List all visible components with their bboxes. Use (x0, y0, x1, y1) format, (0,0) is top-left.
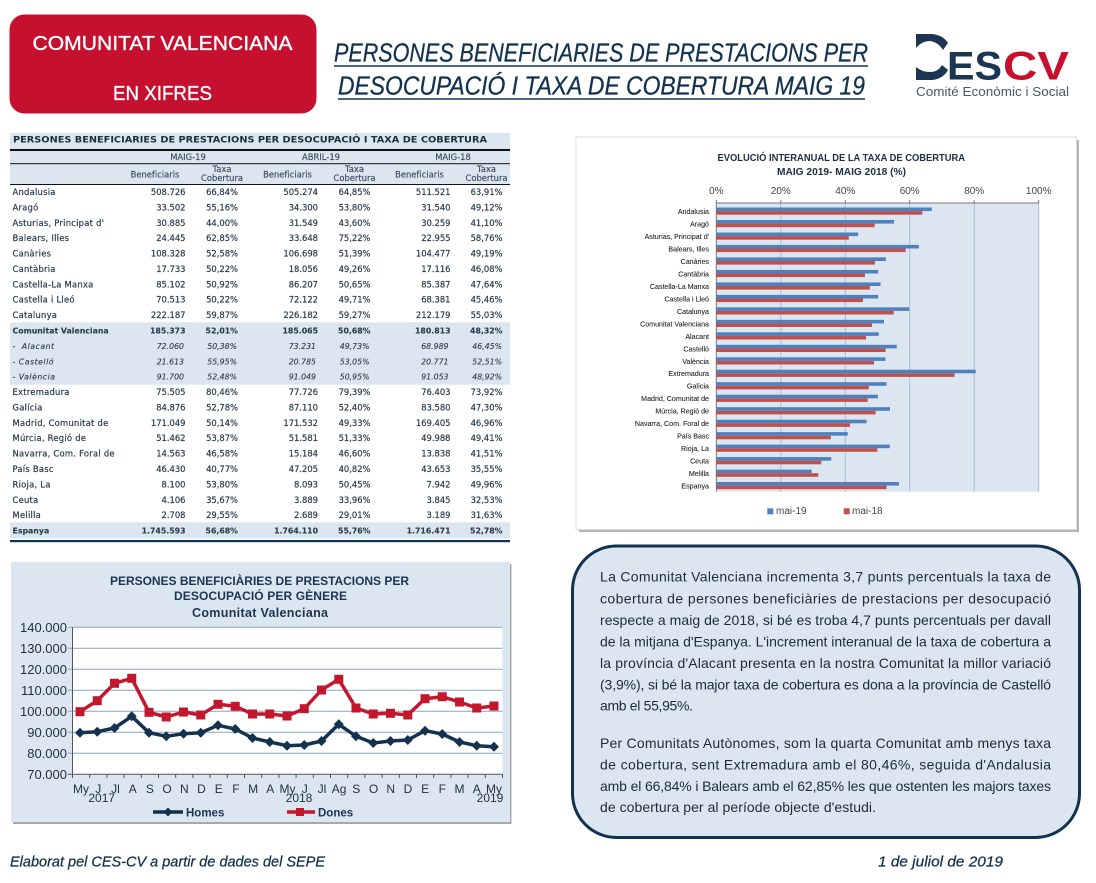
table rows: 44,00% (206, 218, 238, 228)
table rows: 3.189 (427, 510, 450, 520)
main title: PERSONES BENEFICIARIES DE PRESTACIONS PER (334, 38, 868, 68)
table rows: 180.813 (415, 326, 450, 336)
table rows: - València (12, 373, 56, 382)
table rows: Aragó (12, 202, 38, 212)
bar chart legend (767, 506, 883, 517)
line chart x axis labels: A (129, 782, 137, 796)
table rows: Comunitat Valenciana (12, 326, 109, 336)
table rows: 52,01% (206, 326, 238, 336)
table rows: 7.942 (427, 479, 450, 489)
line chart x axis labels: My (486, 782, 502, 796)
table rows: 50,92% (206, 279, 238, 289)
bar chart category labels: Catalunya (677, 308, 709, 316)
table rows: 3.889 (294, 495, 318, 505)
bar chart axis labels: 0% (709, 186, 724, 197)
table rows: 2.689 (294, 510, 318, 520)
line chart x axis labels: 2018 (286, 791, 313, 805)
line chart x axis labels: 2017 (88, 791, 115, 805)
bar chart category labels: Cantàbria (678, 270, 709, 278)
line chart y axis labels: 90.000 (27, 725, 67, 740)
table rows: 222.187 (151, 310, 186, 320)
table rows: 226.182 (283, 310, 318, 320)
table rows: 47.205 (289, 464, 318, 474)
bar chart axis labels: 100% (1026, 186, 1052, 197)
table column headers (131, 152, 508, 183)
bars: mai-19 (716, 208, 976, 486)
header badge: Comunitat Valenciana en xifres (10, 14, 316, 114)
table rows: 55,95% (207, 357, 237, 366)
table rows: 51.462 (156, 433, 186, 443)
paragraph 1: la província d'Alacant presenta en la nostra Comunitat la millor variació (600, 655, 1051, 671)
line chart y axis labels: 100.000 (20, 704, 67, 719)
table rows: 48,32% (470, 326, 503, 336)
paragraph 2 (600, 735, 1051, 815)
table rows: 49,96% (471, 479, 503, 489)
table rows: 20.785 (289, 357, 316, 366)
series: Dones (80, 678, 494, 717)
logo: CES-CV: Comité Econòmic i Social (916, 84, 1069, 99)
table rows: 1.716.471 (407, 527, 450, 536)
table column headers: Taxa (476, 164, 496, 174)
table rows: 41,10% (471, 218, 503, 228)
table rows: 73.231 (289, 342, 316, 351)
bar chart category labels: Aragó (690, 220, 709, 228)
bar chart category labels: Melilla (689, 470, 709, 478)
bar chart category labels: Castelló (683, 345, 709, 353)
table rows: 53,80% (339, 202, 371, 212)
table column headers: Beneficiaris (131, 170, 179, 180)
bar chart category labels: Rioja, La (681, 445, 709, 453)
table rows: 80,46% (206, 387, 238, 397)
table rows: Balears, Illes (12, 233, 69, 243)
callout: text summary (572, 546, 1080, 838)
line chart title (110, 573, 409, 620)
table rows: 52,51% (472, 357, 502, 366)
line chart x axis labels: F (232, 782, 240, 796)
table rows: 185.373 (150, 326, 186, 336)
table rows: 68.989 (421, 342, 449, 351)
line chart x axis labels: My (280, 782, 296, 796)
table rows: 508.726 (151, 187, 186, 197)
table rows: 35,55% (471, 464, 503, 474)
table rows: 49,26% (339, 264, 371, 274)
table rows: Espanya (12, 527, 49, 536)
line chart x axis labels: Jl (111, 782, 120, 796)
table rows: Ceuta (12, 495, 38, 505)
line chart x axis labels: E (215, 782, 223, 796)
bar chart category labels: València (682, 358, 709, 366)
table rows: 46,58% (206, 449, 238, 459)
bar chart category labels: Madrid, Comunitat de (641, 395, 709, 403)
table rows: 49,41% (471, 433, 503, 443)
bar chart category labels: Extremadura (668, 370, 709, 378)
table rows: 33.502 (156, 202, 186, 212)
bar chart category labels (635, 208, 709, 490)
bar chart category labels: Galícia (687, 383, 709, 391)
paragraph 1: cobertura de persones beneficiàries de prestacions per desocupació (600, 590, 1051, 606)
table rows: 59,87% (206, 310, 238, 320)
table rows: 51.581 (289, 433, 318, 443)
table column headers: MAIG-19 (170, 152, 206, 162)
table rows: 48,92% (472, 373, 502, 382)
line chart x axis labels: N (180, 782, 189, 796)
line chart x axis labels (73, 782, 504, 805)
table rows: 18.056 (289, 264, 318, 274)
paragraph 2: de cobertura, sent Extremadura amb el 80,46%, seguida d'Andalusia (600, 756, 1051, 772)
table rows: 50,65% (339, 279, 371, 289)
table rows: 86.207 (289, 279, 318, 289)
table rows: 72.122 (289, 295, 318, 305)
table rows: País Basc (12, 464, 54, 474)
main title: DESOCUPACIÓ I TAXA DE COBERTURA MAIG 19 (338, 70, 865, 100)
table rows: 511.521 (416, 187, 450, 197)
main title (334, 38, 868, 100)
table rows: 212.179 (416, 310, 450, 320)
table rows: 91.053 (421, 373, 449, 382)
paragraph 1 (600, 568, 1051, 714)
table rows: Cantàbria (12, 264, 56, 274)
line chart x axis labels: F (439, 782, 446, 796)
bar chart title: MAIG 2019- MAIG 2018 (%) (777, 166, 906, 178)
table rows: 40,82% (339, 464, 371, 474)
bar chart category labels: Castella i Lleó (664, 295, 709, 303)
table rows: 46,60% (339, 449, 371, 459)
table rows: 35,67% (206, 495, 238, 505)
table rows: 75,22% (339, 233, 371, 243)
line chart y axis labels (20, 620, 67, 782)
table rows: 505.274 (283, 187, 318, 197)
bar chart category labels: Ceuta (690, 458, 709, 466)
table rows: 84.876 (156, 402, 186, 412)
table rows: 2.708 (162, 510, 186, 520)
line chart x axis labels: O (369, 782, 378, 796)
table rows: 85.102 (156, 279, 186, 289)
table rows: Melilla (12, 510, 41, 520)
table column headers: Cobertura (333, 173, 376, 183)
table rows: 50,38% (207, 342, 237, 351)
bar chart title (718, 151, 965, 178)
table rows: 52,40% (339, 402, 371, 412)
table rows: 72.060 (157, 342, 184, 351)
table rows: 31,63% (471, 510, 503, 520)
table rows: 31.540 (421, 202, 450, 212)
line chart y axis labels: 130.000 (20, 641, 67, 656)
table rows: 30.885 (156, 218, 186, 228)
table rows: 87.110 (289, 402, 318, 412)
table rows: 171.532 (283, 418, 318, 428)
table rows: 91.049 (289, 373, 316, 382)
table rows: 49,19% (471, 249, 503, 259)
line chart x axis labels: J (95, 782, 101, 796)
table rows: 46,08% (471, 264, 503, 274)
table rows: 50,95% (340, 373, 370, 382)
table rows: 55,16% (206, 202, 238, 212)
table rows: 49,71% (339, 295, 371, 305)
footer: date: 1 de juliol de 2019 (878, 854, 1003, 870)
line chart x axis labels: A (473, 782, 481, 796)
table rows: Asturias, Principat d' (12, 218, 104, 228)
table rows: 17.733 (156, 264, 186, 274)
paragraph 1: amb el 55,95%. (600, 698, 693, 714)
table rows: 8.100 (162, 479, 186, 489)
panel: bar chart evolució interanual (576, 137, 1079, 532)
bar chart category labels: Asturias, Principat d' (645, 233, 709, 241)
table rows: 15.184 (289, 449, 318, 459)
table rows: 51,39% (339, 249, 371, 259)
paragraph 2: Per Comunitats Autònomes, som la quarta Comunitat amb menys taxa (600, 735, 1051, 751)
table rows: 73,92% (471, 387, 503, 397)
line chart x axis labels: D (404, 782, 413, 796)
bar chart title: EVOLUCIÓ INTERANUAL DE LA TAXA DE COBERTURA (718, 151, 965, 164)
table rows: 56,68% (206, 527, 238, 536)
table rows: 1.745.593 (142, 527, 186, 536)
table rows: Canàries (12, 249, 51, 259)
line chart y axis labels: 140.000 (20, 620, 67, 635)
line chart y axis labels: 70.000 (27, 767, 67, 782)
table rows: 32,53% (471, 495, 503, 505)
table rows: 51,33% (339, 433, 371, 443)
bars: mai-18 (716, 211, 955, 489)
line chart x axis labels: Jl (318, 782, 326, 796)
table rows: Galícia (12, 402, 43, 412)
line chart legend (153, 808, 353, 820)
table rows: 50,68% (338, 326, 371, 336)
table rows: 14.563 (156, 449, 186, 459)
paragraph 1: de la mitjana d'Espanya. L'increment interanual de la taxa de cobertura a (600, 634, 1051, 650)
table column headers: Beneficiaris (395, 170, 444, 180)
header badge: Comunitat Valenciana en xifres: COMUNITAT VALENCIANA (32, 32, 293, 55)
line chart x axis labels: My (73, 782, 89, 796)
table rows: 41,51% (471, 449, 503, 459)
table rows: 77.726 (289, 387, 318, 397)
table rows: 33,96% (339, 495, 371, 505)
table rows: 50,22% (206, 295, 238, 305)
table rows (12, 187, 503, 536)
table column headers: Cobertura (465, 173, 508, 183)
table rows: 20.771 (421, 357, 448, 366)
paragraph 1: La Comunitat Valenciana incrementa 3,7 punts percentuals la taxa de (600, 568, 1051, 584)
bar chart axis labels: 40% (835, 186, 855, 197)
table rows: 17.116 (421, 264, 450, 274)
table rows: 34.300 (289, 202, 318, 212)
table rows: Castella-La Manxa (12, 279, 94, 289)
table rows: 29,55% (206, 510, 238, 520)
series: Homes (80, 716, 494, 747)
table rows: 52,48% (207, 373, 237, 382)
table rows: 3.845 (427, 495, 450, 505)
table column headers: Taxa (212, 164, 231, 174)
paragraph 1: respecte a maig de 2018, si bé es troba 4,7 punts percentuals per davall (600, 612, 1051, 628)
line chart x axis labels: M (248, 782, 258, 796)
table rows: 64,85% (339, 187, 371, 197)
table rows: 49,73% (340, 342, 370, 351)
table rows: 104.477 (416, 249, 450, 259)
bar chart legend: mai-19 (776, 506, 807, 517)
table rows: 85.387 (421, 279, 450, 289)
bar chart category labels: Canàries (681, 258, 709, 266)
line chart y axis labels: 80.000 (27, 746, 67, 761)
table rows: 52,78% (470, 527, 503, 536)
logo: CES-CV (916, 34, 1069, 99)
table rows: 43,60% (339, 218, 371, 228)
table rows: 50,45% (339, 479, 371, 489)
table rows: 33.648 (289, 233, 318, 243)
table rows: 62,85% (206, 233, 238, 243)
table rows: 185.065 (282, 326, 318, 336)
table column headers: ABRIL-19 (302, 152, 340, 162)
table rows: 46,96% (471, 418, 503, 428)
table rows: 49,12% (471, 202, 503, 212)
panel: line chart per gènere (11, 562, 512, 824)
table rows: 66,84% (206, 187, 238, 197)
line chart title: DESOCUPACIÓ PER GÈNERE (174, 588, 347, 603)
table rows: 22.955 (421, 233, 450, 243)
bar chart category labels: País Basc (677, 433, 709, 441)
line chart title: Comunitat Valenciana (192, 606, 329, 620)
table rows: 70.513 (156, 295, 186, 305)
line chart x axis labels: O (162, 782, 172, 796)
table rows: 79,39% (339, 387, 371, 397)
line chart x axis labels: D (197, 782, 206, 796)
table rows: 49,33% (339, 418, 371, 428)
paragraph 1: (3,9%), si bé la major taxa de cobertura es dona a la província de Castelló (600, 676, 1051, 692)
table rows: 13.838 (421, 449, 450, 459)
line chart x axis labels: A (266, 782, 274, 796)
table column headers: Cobertura (201, 173, 243, 183)
line chart legend: Homes (186, 808, 224, 820)
bar chart category labels: Andalusia (678, 208, 709, 216)
table rows: Catalunya (12, 310, 57, 320)
table rows: 30.259 (421, 218, 450, 228)
header badge: Comunitat Valenciana en xifres: EN XIFRES (113, 82, 212, 105)
bar chart category labels: Alacant (685, 333, 709, 341)
table column headers: MAIG-18 (435, 152, 471, 162)
table rows: 50,14% (206, 418, 238, 428)
table rows: 43.653 (421, 464, 450, 474)
line chart y axis labels: 110.000 (21, 683, 67, 698)
table rows: 106.698 (283, 249, 318, 259)
table rows: 52,58% (206, 249, 238, 259)
bar chart category labels: Castella-La Manxa (650, 283, 709, 291)
line chart x axis labels: J (302, 782, 308, 796)
line chart x axis labels: N (386, 782, 395, 796)
table rows: Navarra, Com. Foral de (12, 449, 115, 459)
line chart x axis labels: E (421, 782, 429, 796)
table rows: 47,64% (471, 279, 503, 289)
table rows: 91.700 (157, 373, 184, 382)
table rows: 55,03% (471, 310, 503, 320)
line chart y axis labels: 120.000 (20, 662, 67, 677)
table rows: 40,77% (206, 464, 238, 474)
table rows: 24.445 (156, 233, 186, 243)
table rows: Extremadura (12, 387, 70, 397)
table rows: 55,76% (338, 527, 371, 536)
table column headers: Taxa (344, 164, 364, 174)
table rows: 53,87% (206, 433, 238, 443)
line chart x axis labels: 2019 (477, 791, 504, 805)
line chart legend: Dones (318, 808, 353, 820)
line chart x axis labels: S (352, 782, 360, 796)
table rows: 46.430 (156, 464, 186, 474)
bar chart axis labels: 80% (964, 186, 984, 197)
table rows: Múrcia, Regió de (12, 433, 86, 443)
table rows: 31.549 (289, 218, 318, 228)
line chart x axis labels: S (146, 782, 154, 796)
footer: source: Elaborat pel CES-CV a partir de dades del SEPE (10, 854, 325, 870)
table rows: 21.613 (157, 357, 184, 366)
bar chart axis labels: 60% (900, 186, 920, 197)
bar chart category labels: Balears, Illes (668, 245, 709, 253)
table rows: 47,30% (471, 402, 503, 412)
table rows: 50,22% (206, 264, 238, 274)
table rows: 53,80% (206, 479, 238, 489)
table rows: Castella i Lleó (12, 295, 75, 305)
table heading: PERSONES BENEFICIARIES DE PRESTACIONS PER DESOCUPACIÓ I TAXA DE COBERTURA (13, 134, 488, 146)
table rows: 29,01% (339, 510, 371, 520)
table rows: 52,78% (206, 402, 238, 412)
bar chart axis labels: 20% (771, 186, 791, 197)
table rows: 53,05% (340, 357, 370, 366)
table rows: 83.580 (421, 402, 450, 412)
bar chart axis labels (709, 186, 1052, 197)
table rows: 59,27% (339, 310, 371, 320)
bar chart category labels: Múrcia, Regió de (655, 408, 709, 416)
table: persones beneficiaries (10, 133, 510, 542)
table rows: 63,91% (471, 187, 503, 197)
paragraph 2: de cobertura per al període objecte d'estudi. (600, 799, 876, 815)
logo: CES-CV: CV (1003, 44, 1069, 88)
table rows: 46,45% (472, 342, 502, 351)
table column headers: Beneficiaris (263, 170, 312, 180)
line chart title: PERSONES BENEFICIÀRIES DE PRESTACIONS PER (110, 573, 409, 588)
table rows: 4.106 (162, 495, 186, 505)
table rows: 76.403 (421, 387, 450, 397)
bar chart category labels: Comunitat Valenciana (640, 320, 709, 328)
bar chart category labels: Espanya (681, 482, 709, 490)
bar chart category labels: Navarra, Com. Foral de (635, 420, 709, 428)
table rows: 58,76% (471, 233, 503, 243)
table rows: 171.049 (151, 418, 186, 428)
logo: CES-CV: ES (947, 44, 1002, 88)
line chart x axis labels: Ag (332, 782, 346, 796)
table rows: - Castelló (12, 357, 54, 366)
table rows: 8.093 (294, 479, 318, 489)
table rows: 75.505 (156, 387, 186, 397)
table rows: Andalusia (12, 187, 56, 197)
table rows: Madrid, Comunitat de (12, 418, 108, 428)
line chart x axis labels: M (454, 782, 464, 796)
table rows: 1.764.110 (274, 527, 319, 536)
paragraph 2: amb el 66,84% i Balears amb el 62,85% les que ostenten les majors taxes (600, 778, 1051, 794)
table rows: 49.988 (421, 433, 450, 443)
table rows: 108.328 (151, 249, 186, 259)
table rows: Rioja, La (12, 479, 51, 489)
bar chart legend: mai-18 (852, 506, 883, 517)
table rows: 68.381 (421, 295, 450, 305)
table rows: 45,46% (471, 295, 503, 305)
table rows: - Alacant (12, 342, 55, 351)
table rows: 169.405 (416, 418, 450, 428)
